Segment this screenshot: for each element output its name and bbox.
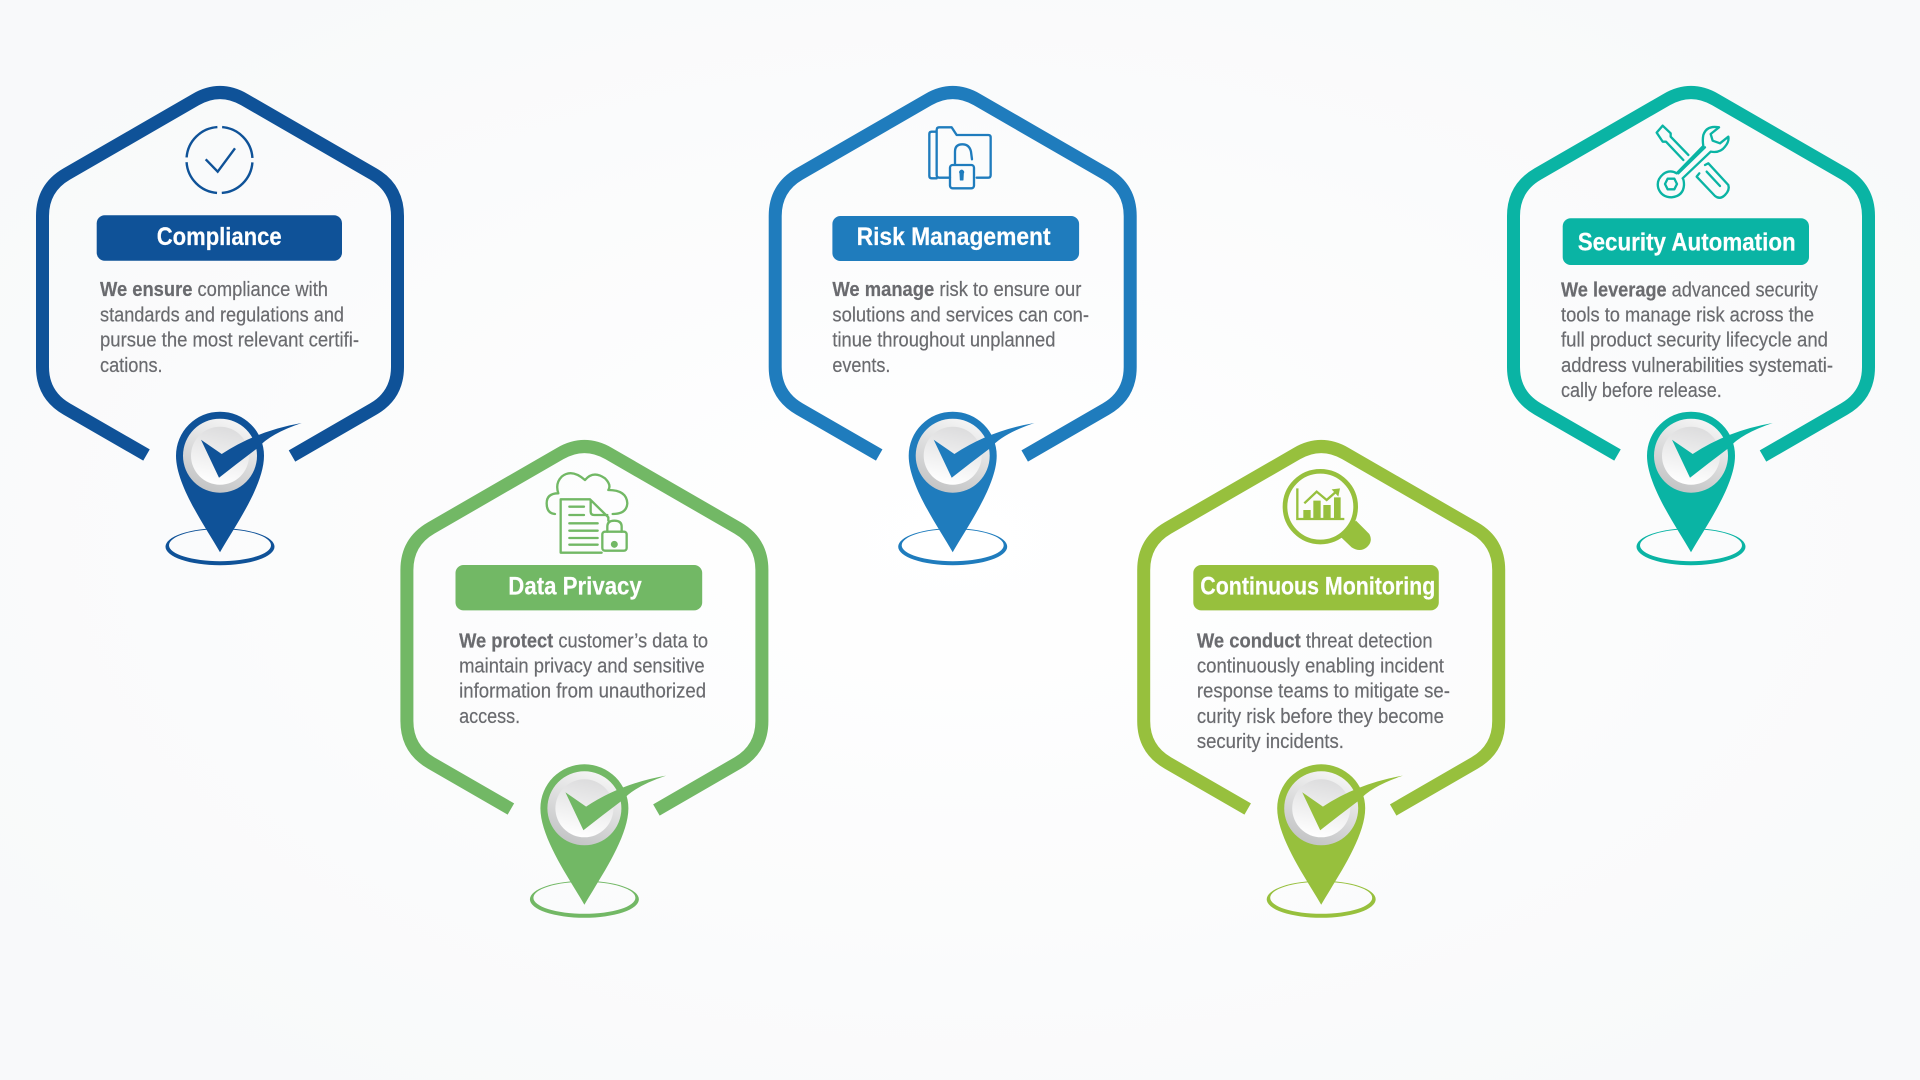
location pin with check — [166, 412, 302, 565]
icon: cloud document lock — [547, 473, 627, 553]
text: Continuous Monitoring description: We conduct threat detection — [1197, 630, 1433, 652]
text: Security Automation description: We leverage advanced security — [1561, 279, 1818, 301]
heading: Continuous Monitoring: Continuous Monitoring — [1200, 573, 1435, 601]
panel: Compliance — [42, 92, 398, 565]
text: Risk Management description: We manage risk to ensure our — [832, 279, 1082, 301]
text: Continuous Monitoring description — [1197, 630, 1450, 753]
heading: Continuous Monitoring — [1193, 565, 1439, 610]
panel: Data Privacy — [407, 446, 762, 918]
location pin with check — [1636, 412, 1773, 565]
text: Compliance description: pursue the most relevant certifi- — [100, 330, 359, 352]
text: Security Automation description: address vulnerabilities systemati- — [1561, 355, 1833, 377]
panel: Continuous Monitoring — [1144, 446, 1499, 918]
icon: wrench and screwdriver — [1657, 126, 1729, 198]
text: Risk Management description — [832, 279, 1089, 377]
heading: Data Privacy: Data Privacy — [508, 573, 642, 601]
location pin with check — [1267, 764, 1403, 918]
panel: Security Automation — [1514, 92, 1868, 565]
heading: Data Privacy — [456, 565, 702, 610]
text: Continuous Monitoring description: continuously enabling incident — [1197, 656, 1444, 678]
panel: Risk Management — [775, 92, 1130, 565]
text: Data Privacy description: information from unauthorized — [459, 681, 706, 703]
heading: Security Automation — [1563, 218, 1809, 265]
hexagon outline: Compliance — [42, 92, 398, 456]
text: Compliance description — [100, 279, 359, 377]
text: Security Automation description — [1561, 279, 1833, 402]
text: Security Automation description: cally before release. — [1561, 380, 1722, 402]
text: Data Privacy description — [459, 630, 708, 728]
text: Risk Management description: events. — [832, 355, 890, 377]
text: Compliance description: We ensure compliance with — [100, 279, 328, 301]
location pin with check — [898, 412, 1034, 565]
icon: magnifier with chart — [1285, 471, 1371, 550]
text: Compliance description: standards and regulations and — [100, 304, 344, 326]
heading: Compliance — [97, 215, 342, 261]
heading: Risk Management: Risk Management — [857, 223, 1051, 251]
text: Data Privacy description: We protect customer’s data to — [459, 630, 708, 652]
text: Continuous Monitoring description: curity risk before they become — [1197, 706, 1444, 728]
text: Security Automation description: full product security lifecycle and — [1561, 330, 1828, 352]
icon: dashed check circle — [186, 127, 252, 193]
text: Continuous Monitoring description: security incidents. — [1197, 731, 1344, 753]
heading: Risk Management — [832, 216, 1079, 261]
hexagon outline: Risk Management — [775, 92, 1130, 456]
hexagon outline: Continuous Monitoring — [1144, 446, 1499, 810]
text: Data Privacy description: maintain privacy and sensitive — [459, 656, 705, 678]
heading: Security Automation: Security Automation — [1578, 229, 1796, 257]
location pin with check — [530, 764, 666, 918]
text: Risk Management description: tinue throughout unplanned — [832, 330, 1055, 352]
hexagon outline: Security Automation — [1514, 92, 1868, 456]
text: Security Automation description: tools to manage risk across the — [1561, 304, 1814, 326]
heading: Compliance: Compliance — [157, 223, 282, 251]
text: Risk Management description: solutions and services can con- — [832, 304, 1089, 326]
text: Compliance description: cations. — [100, 355, 163, 377]
icon: folder with open lock — [929, 127, 991, 188]
text: Data Privacy description: access. — [459, 706, 520, 728]
hexagon outline: Data Privacy — [407, 446, 762, 810]
text: Continuous Monitoring description: response teams to mitigate se- — [1197, 681, 1450, 703]
